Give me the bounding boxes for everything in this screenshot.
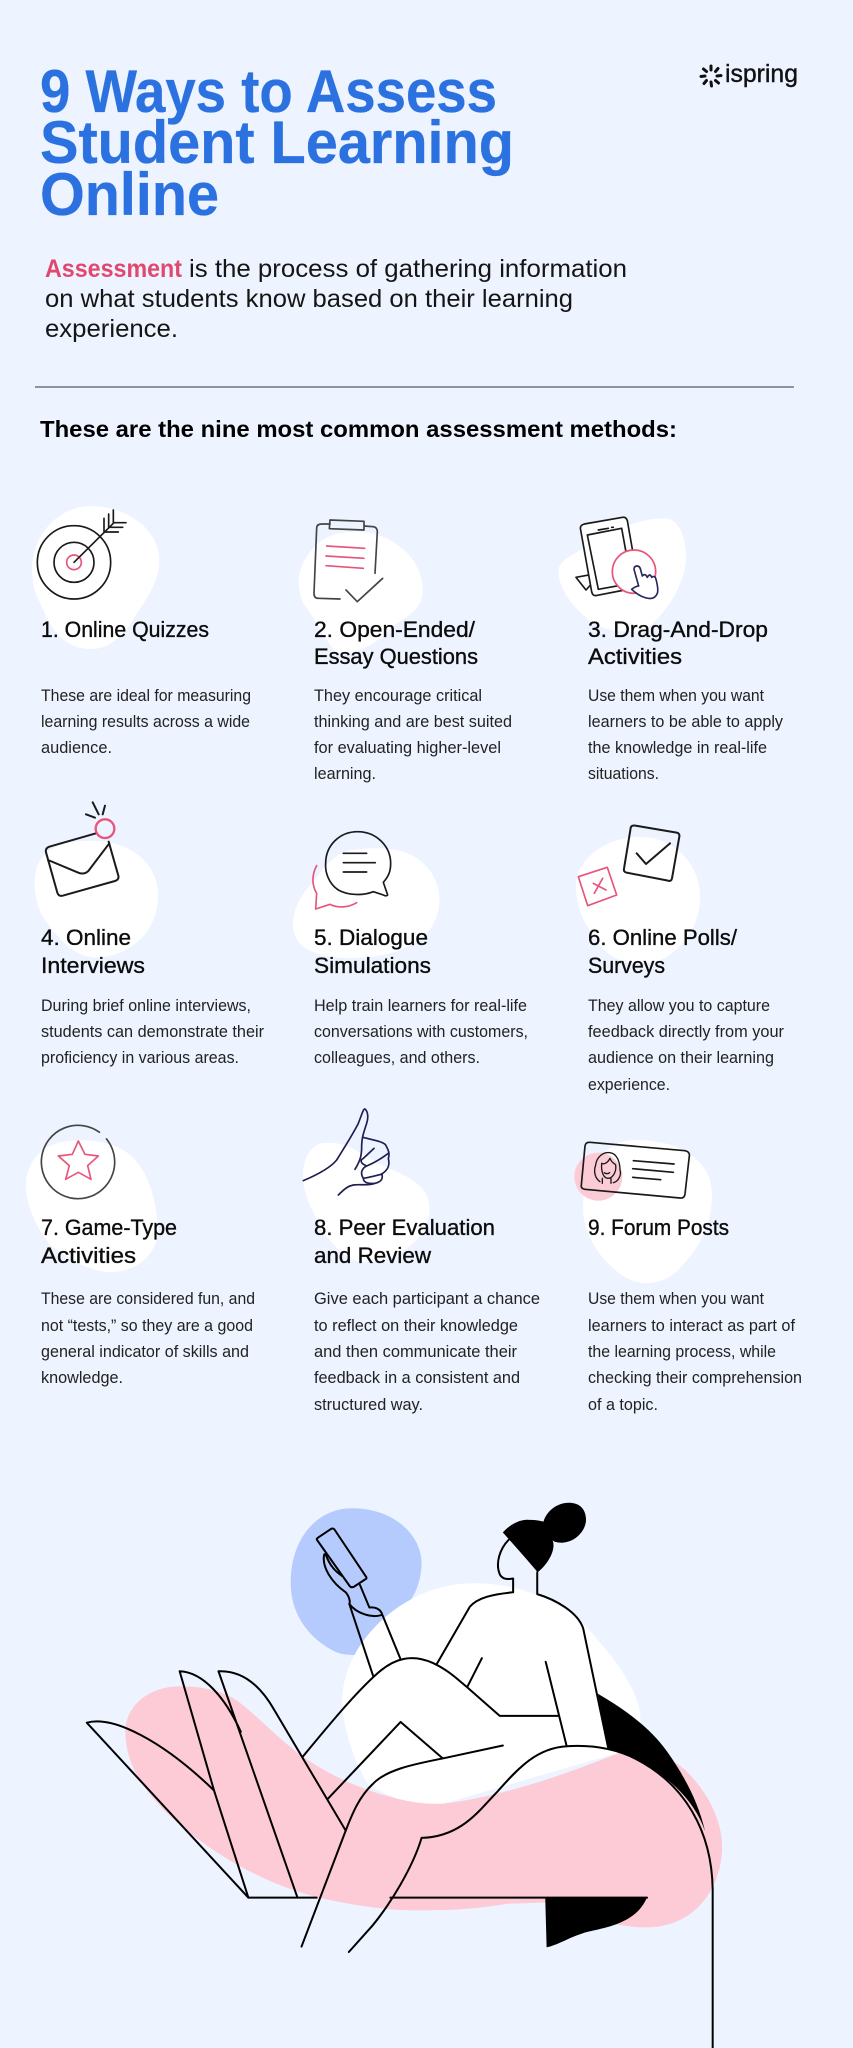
title: 9 Ways to Assess (40, 58, 497, 125)
body text: structured way. (314, 1395, 423, 1414)
icon: speech bubbles (293, 832, 439, 958)
blue blob (291, 1508, 422, 1655)
intro paragraph: Assessment (45, 255, 183, 283)
heading: Activities (41, 1243, 136, 1268)
panel: 2. open-ended essay questions (299, 520, 512, 783)
figure outline (302, 1540, 608, 1952)
hair (503, 1503, 586, 1572)
intro paragraph: experience. (45, 315, 178, 343)
intro paragraph (45, 255, 627, 343)
heading (588, 617, 768, 669)
chair back shadow (598, 1694, 705, 1831)
body text: audience on their learning (588, 1048, 774, 1067)
heading: Interviews (41, 953, 145, 978)
white blob (342, 1583, 640, 1804)
pink blob (125, 1686, 722, 1927)
heading: 8. Peer Evaluation (314, 1215, 495, 1240)
body text: Use them when you want (588, 686, 764, 705)
body text: for evaluating higher-level (314, 738, 501, 757)
heading: Surveys (588, 953, 665, 978)
icon: thumbs up (303, 1109, 430, 1262)
body text: conversations with customers, (314, 1022, 528, 1041)
body text: experience. (588, 1075, 670, 1094)
body text: These are considered fun, and (41, 1289, 255, 1308)
body text: checking their comprehension (588, 1368, 802, 1387)
heading (314, 617, 478, 669)
heading: 9. Forum Posts (588, 1215, 729, 1240)
body text: Give each participant a chance (314, 1289, 540, 1308)
body text: to reflect on their knowledge (314, 1316, 518, 1335)
body text: During brief online interviews, (41, 996, 251, 1015)
logo: ispring: ispring (725, 60, 798, 88)
body text: the knowledge in real-life (588, 738, 767, 757)
title: Online (40, 161, 219, 228)
body text: the learning process, while (588, 1342, 776, 1361)
intro paragraph: is the process of gathering information (189, 255, 627, 283)
icon: target with arrow (32, 506, 159, 649)
body text: learners to be able to apply (588, 712, 783, 731)
body text: situations. (588, 764, 659, 783)
body text: not “tests,” so they are a good (41, 1316, 253, 1335)
heading: Essay Questions (314, 644, 478, 669)
body text (588, 686, 783, 783)
body text: colleagues, and others. (314, 1048, 480, 1067)
body text: general indicator of skills and (41, 1342, 249, 1361)
body text: feedback in a consistent and (314, 1368, 520, 1387)
heading (41, 925, 145, 978)
heading: 5. Dialogue (314, 925, 428, 950)
heading: 2. Open-Ended/ (314, 617, 476, 642)
panel: 7. game-type activities (26, 1125, 255, 1387)
panel: 4. online interviews (34, 802, 264, 1067)
body text: learners to interact as part of (588, 1316, 795, 1335)
heading (41, 1215, 177, 1268)
heading: 7. Game-Type (41, 1215, 177, 1240)
body text: Help train learners for real-life (314, 996, 527, 1015)
body text: proficiency in various areas. (41, 1048, 239, 1067)
panel: 3. drag-and-drop activities (558, 517, 783, 783)
body text (314, 686, 512, 783)
subheading: These are the nine most common assessment methods: (40, 416, 677, 442)
panel: 1. online quizzes (32, 506, 251, 757)
chair base shadow (545, 1897, 647, 1947)
heading (314, 1215, 495, 1268)
intro paragraph: on what students know based on their learning (45, 285, 573, 313)
panel: 9. forum posts (574, 1140, 802, 1414)
heading (314, 925, 431, 978)
icon: envelope with notification (34, 802, 158, 958)
title: Student Learning (40, 109, 514, 176)
icon: profile card (574, 1140, 712, 1283)
heading (588, 925, 738, 978)
body text (588, 1289, 802, 1414)
icon: phone with tapping hand (558, 517, 686, 632)
body text: audience. (41, 738, 112, 757)
chair outline (87, 1671, 713, 2048)
heading: and Review (314, 1243, 431, 1268)
heading: 1. Online Quizzes (41, 617, 209, 642)
body text: learning results across a wide (41, 712, 250, 731)
panel: 5. dialogue simulations (293, 832, 528, 1067)
body text: They allow you to capture (588, 996, 770, 1015)
heading: 6. Online Polls/ (588, 925, 738, 950)
panel: 8. peer evaluation and review (303, 1109, 540, 1414)
body text: students can demonstrate their (41, 1022, 264, 1041)
body text: feedback directly from your (588, 1022, 784, 1041)
icon: check and cross cards (576, 826, 700, 964)
heading: Activities (588, 644, 682, 669)
body text (314, 1289, 540, 1414)
icon: star in circle (26, 1125, 158, 1272)
body text: thinking and are best suited (314, 712, 512, 731)
body text: learning. (314, 764, 376, 783)
illustration: woman sitting with phone (87, 1503, 722, 2048)
body text: of a topic. (588, 1395, 658, 1414)
body text: These are ideal for measuring (41, 686, 251, 705)
body text (588, 996, 784, 1094)
body text (41, 1289, 255, 1387)
heading: Simulations (314, 953, 431, 978)
body text (314, 996, 528, 1067)
body text: and then communicate their (314, 1342, 517, 1361)
body text: knowledge. (41, 1368, 123, 1387)
title (40, 58, 514, 228)
icon: clipboard with check (299, 520, 423, 653)
body text: They encourage critical (314, 686, 482, 705)
body text: Use them when you want (588, 1289, 764, 1308)
phone (317, 1528, 367, 1587)
heading: 4. Online (41, 925, 131, 950)
body text (41, 996, 264, 1067)
heading: 3. Drag-And-Drop (588, 617, 768, 642)
panel: 6. online polls and surveys (576, 826, 784, 1094)
body text (41, 686, 251, 757)
